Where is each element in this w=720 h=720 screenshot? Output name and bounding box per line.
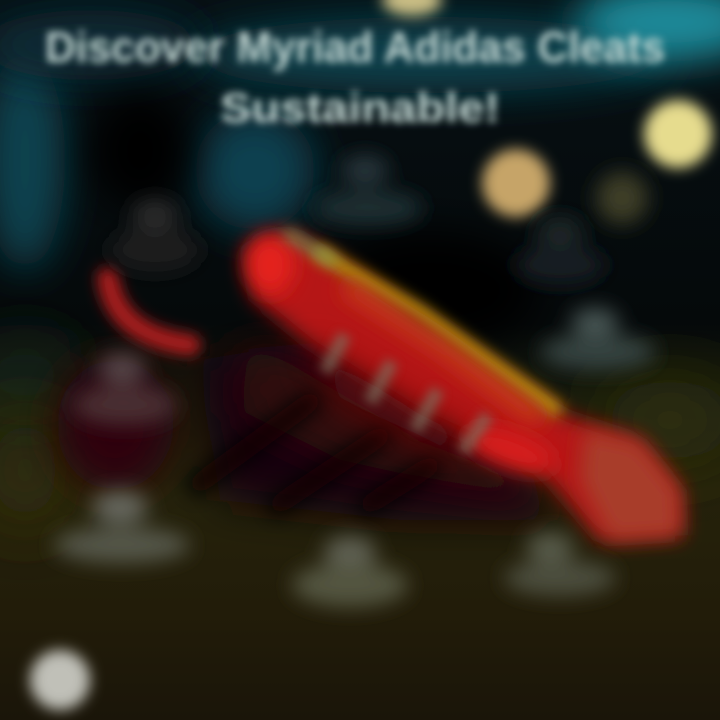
callout: lower right (504, 532, 616, 596)
orb: top centre (382, 0, 442, 16)
orange band (345, 285, 540, 420)
callout: top centre (312, 155, 424, 226)
title (45, 23, 665, 131)
logo badge (30, 650, 90, 710)
title: Discover Myriad Adidas Cleats (45, 23, 665, 72)
main shoe (245, 232, 682, 540)
yellow stripe (315, 250, 560, 412)
shoe dark underside (300, 340, 500, 450)
cleat laces in dark (190, 395, 440, 510)
red midfoot (459, 417, 561, 483)
title: Sustainable! (220, 84, 500, 131)
light orbs (382, 0, 712, 224)
callout: upper right (514, 216, 606, 285)
callout: right (540, 308, 656, 370)
callout: upper left (109, 199, 201, 272)
shoe shadow body (57, 340, 560, 520)
red curved tab (108, 278, 190, 345)
shoe body (245, 233, 682, 540)
bright toe highlight (246, 235, 294, 295)
callout: lower left (54, 491, 190, 563)
orb: middle (482, 149, 550, 217)
green tip (285, 232, 335, 262)
callout: lower centre (292, 536, 408, 607)
heel (580, 430, 680, 540)
orb: dim (596, 172, 648, 224)
orb: right (644, 100, 712, 168)
callout: left (73, 353, 177, 425)
side stripes (325, 335, 488, 452)
